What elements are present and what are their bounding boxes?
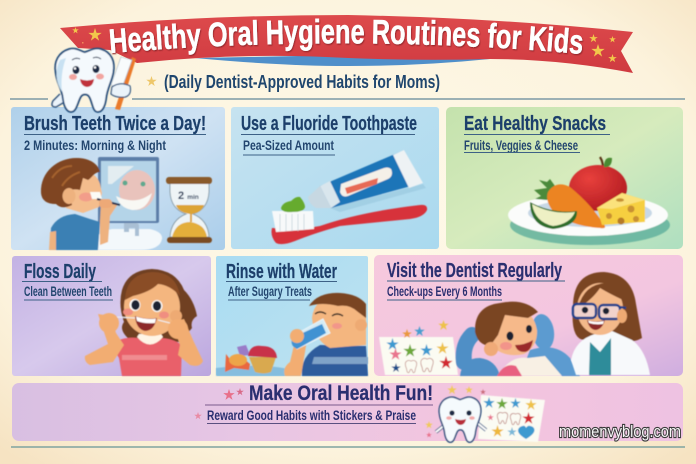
heading: Brush Teeth Twice a Day! (24, 113, 206, 135)
panel: floss daily (12, 256, 211, 376)
title banner (60, 15, 633, 73)
illustration: boy brushing at mirror (41, 157, 212, 250)
icon: pink stars (194, 388, 244, 419)
title text: Healthy Oral Hygiene Routines for Kids (110, 18, 584, 56)
mascot hand (111, 84, 130, 97)
heading: Eat Healthy Snacks (464, 113, 606, 135)
panel: fluoride toothpaste (231, 107, 439, 249)
heading: Rinse with Water (226, 261, 337, 283)
subheading: Check-ups Every 6 Months (387, 284, 502, 299)
icon: small tooth mascot (425, 385, 486, 442)
heading: Use a Fluoride Toothpaste (241, 113, 417, 135)
subheading: 2 Minutes: Morning & Night (24, 138, 166, 153)
hourglass (166, 177, 212, 243)
panel: make oral health fun (12, 382, 683, 442)
hourglass: 2 min (178, 190, 199, 202)
subheading: Fruits, Veggies & Cheese (464, 138, 578, 153)
heading: Visit the Dentist Regularly (387, 260, 563, 282)
panel: healthy snacks (446, 107, 683, 249)
subheading: After Sugary Treats (228, 284, 312, 299)
subheading: Clean Between Teeth (24, 284, 112, 299)
illustration: plate of snacks (508, 157, 670, 245)
illustration: dentist (571, 272, 650, 375)
panel: visit the dentist (374, 255, 683, 376)
illustration: boy in dental chair (460, 302, 580, 376)
banner stars right (589, 34, 617, 62)
illustration: girl flossing (85, 269, 203, 376)
illustration: boy rinsing and treats (216, 293, 368, 376)
heading: Make Oral Health Fun! (249, 382, 433, 405)
panel: rinse with water (216, 256, 368, 376)
subheading: Pea-Sized Amount (243, 138, 334, 153)
mascot face (69, 57, 104, 87)
icon: subtitle star (146, 76, 157, 86)
illustration: toothbrush and toothpaste (272, 150, 427, 244)
icon: tooth mascot with toothbrush (52, 48, 136, 112)
subtitle: (Daily Dentist-Approved Habits for Moms) (164, 71, 440, 92)
subheading: Reward Good Habits with Stickers & Praise (207, 408, 416, 423)
toothbrush handle (115, 57, 136, 110)
illustration: sticker chart (379, 320, 458, 375)
illustration: sticker sheet (478, 395, 545, 442)
heading: Floss Daily (24, 261, 97, 283)
banner stars left (72, 27, 102, 44)
panel: brush teeth (11, 107, 225, 250)
